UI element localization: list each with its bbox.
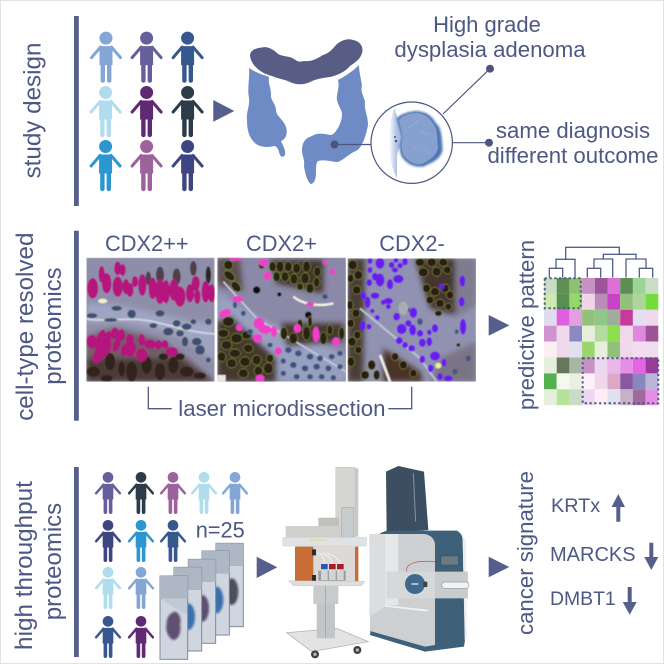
signature: DMBT1 down: [550, 587, 637, 615]
magnified adenoma: [371, 102, 452, 183]
micrograph: CDX2++: [86, 258, 215, 382]
bracket: laser microdissection left: [148, 387, 172, 409]
heading: high throughput proteomics: proteomics: [40, 503, 67, 620]
heading: cell-type resolved proteomics: cell-type resolved: [12, 233, 39, 421]
signature: MARCKS down: MARCKS: [550, 544, 636, 566]
tissue slides: [160, 543, 243, 659]
label: laser microdissection: laser microdissection: [178, 396, 385, 421]
heading: high throughput proteomics: high throughput: [11, 481, 38, 650]
label: high grade dysplasia adenoma: dysplasia adenoma: [394, 37, 586, 62]
label: CDX2-: CDX2-: [379, 231, 445, 256]
section bar: [74, 231, 79, 421]
label: CDX2+: CDX2+: [246, 231, 317, 256]
label: CDX2++: CDX2++: [105, 231, 189, 256]
label: same diagnosis different outcome: same diagnosis: [496, 118, 650, 143]
micrograph: CDX2+: [217, 258, 346, 382]
cohort icons: [96, 472, 247, 658]
callout lines and dots: [330, 65, 494, 148]
signature: KRTx up: KRTx: [551, 495, 600, 517]
label: same diagnosis different outcome: [487, 118, 659, 168]
label: predictive pattern: predictive pattern: [514, 240, 539, 410]
signature: MARCKS down: [550, 543, 658, 570]
section: cell-type resolved proteomics: [12, 231, 658, 421]
section bar: [74, 467, 79, 657]
label: high grade dysplasia adenoma: High grade: [433, 12, 541, 37]
label: cancer signature: cancer signature: [513, 471, 538, 635]
section: high throughput proteomics: [11, 466, 658, 659]
signature: DMBT1 down: DMBT1: [550, 588, 616, 610]
label: n=25: n=25: [196, 517, 245, 542]
section: study design: [20, 12, 659, 206]
signature: KRTx up: [551, 494, 625, 522]
label: high grade dysplasia adenoma: [394, 12, 586, 62]
heading: cell-type resolved proteomics: proteomics: [40, 267, 67, 385]
section bar: [74, 16, 79, 206]
dendrogram: [549, 247, 653, 278]
label: same diagnosis different outcome: different outcome: [487, 143, 659, 168]
heading: study design: study design: [20, 43, 46, 178]
heading: cell-type resolved proteomics: [12, 233, 67, 421]
arrow: to instrument: [257, 557, 277, 578]
patient icons grid: [91, 32, 202, 191]
arrow: to colon: [213, 100, 234, 122]
arrow: to heatmap: [489, 315, 509, 336]
arrow: to signature: [489, 557, 509, 577]
bracket: laser microdissection right: [388, 387, 412, 409]
colon illustration: [247, 39, 368, 184]
instrument: liquid chromatography: [283, 467, 368, 658]
heatmap: [544, 278, 658, 405]
heading: high throughput proteomics: [11, 481, 67, 650]
micrograph: CDX2-: [347, 258, 476, 382]
instrument: mass spectrometer: [369, 466, 469, 652]
